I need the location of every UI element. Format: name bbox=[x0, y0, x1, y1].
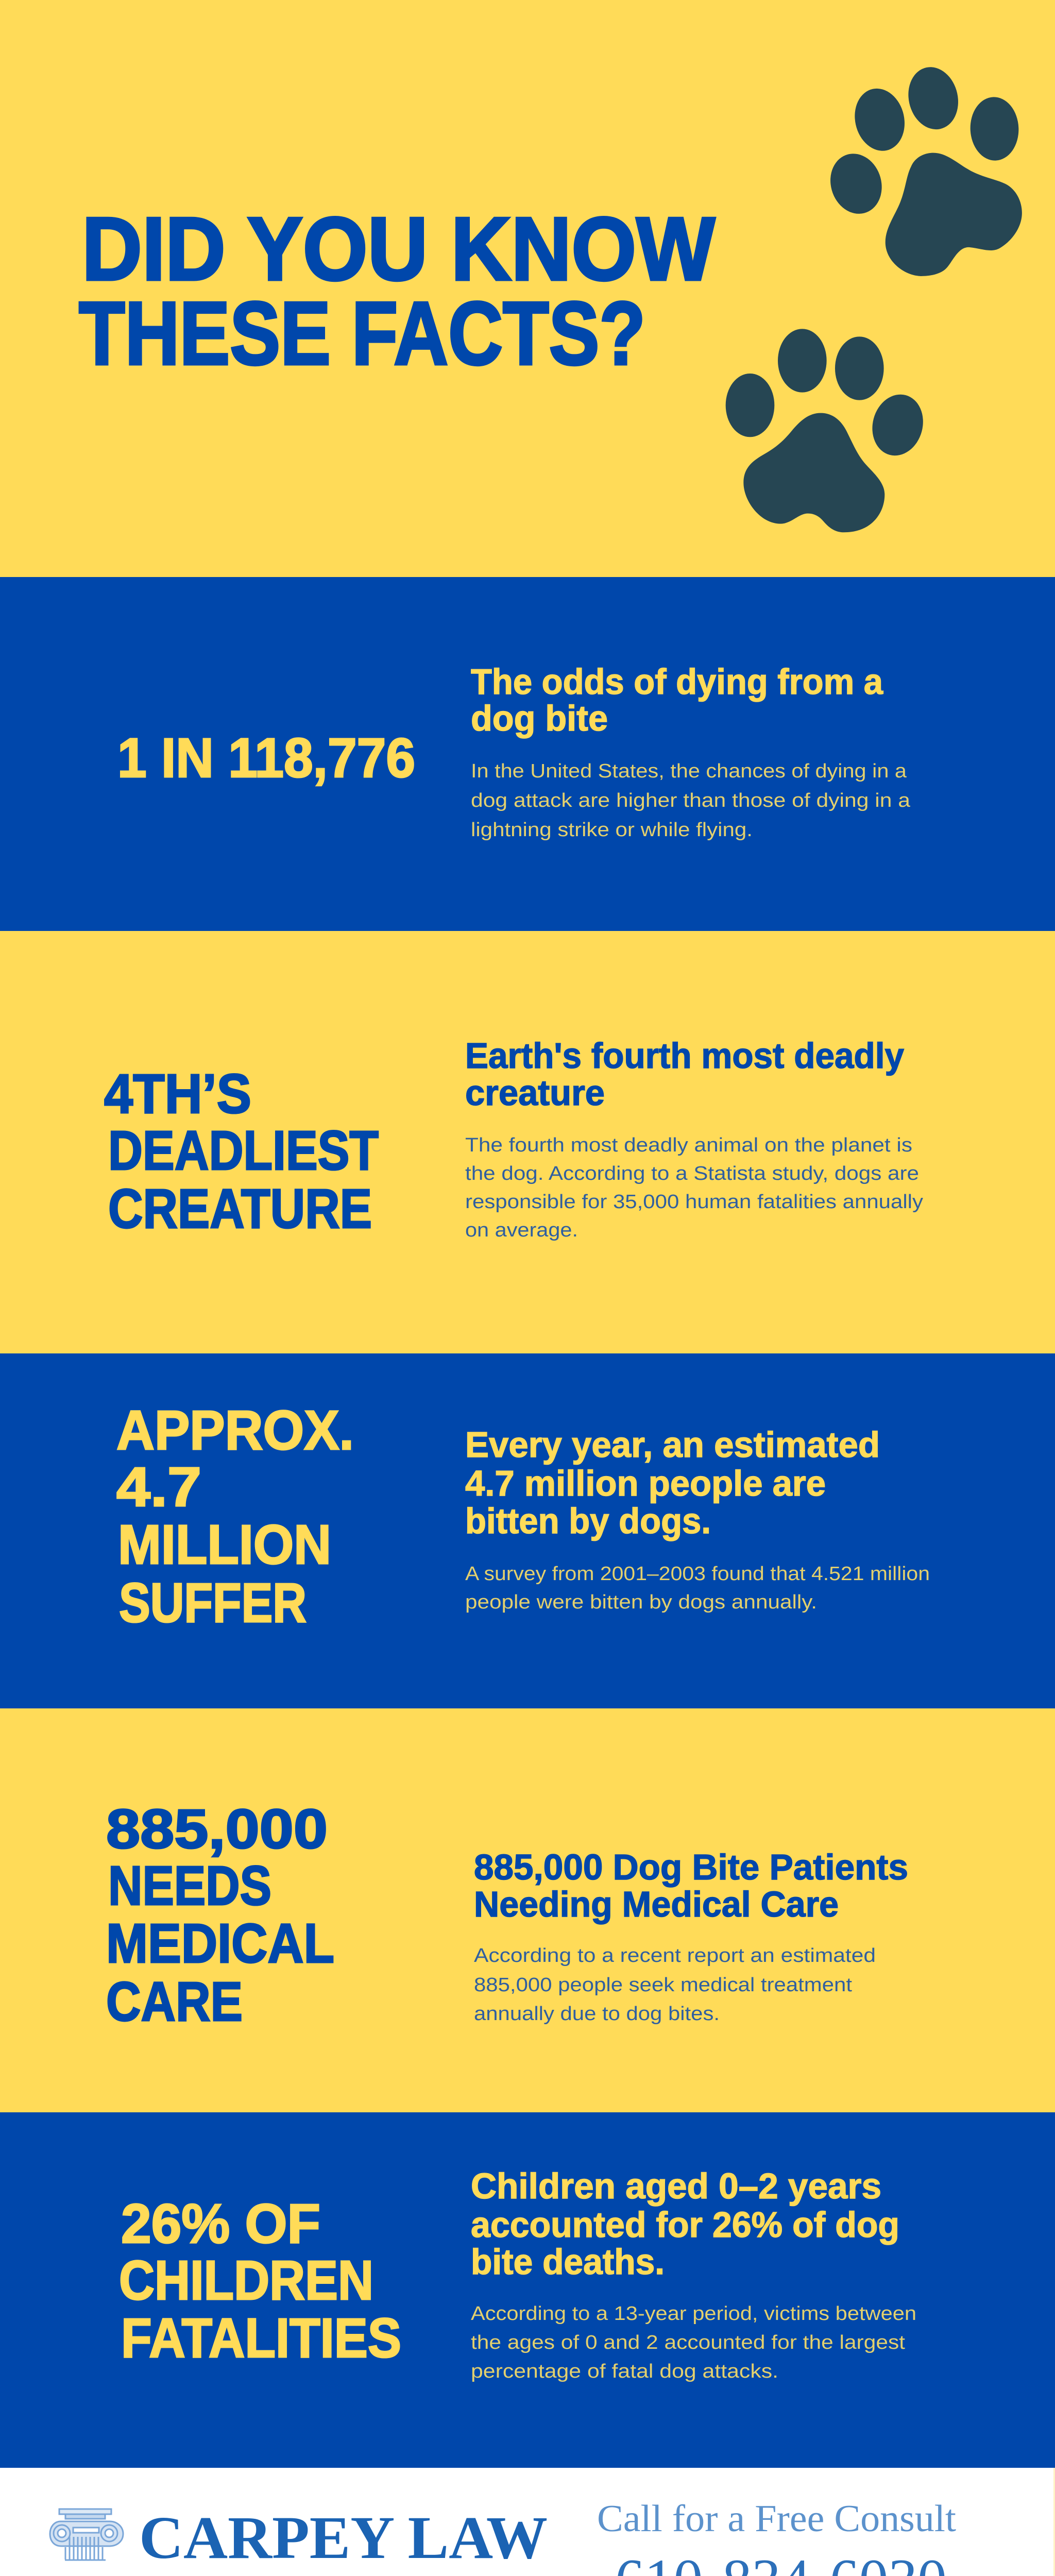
icon: paw print lower bbox=[726, 329, 930, 532]
stat: 4th's deadliest creature bbox=[104, 1062, 379, 1240]
body text bbox=[465, 1563, 930, 1613]
heading: accounted for 26% of dog bbox=[471, 2205, 899, 2245]
title: DID YOU KNOW bbox=[82, 198, 716, 299]
stat: 26% of children fatalities: CHILDREN bbox=[119, 2249, 373, 2311]
stat: approx 4.7 million suffer: MILLION bbox=[118, 1513, 331, 1575]
heading: bitten by dogs. bbox=[465, 1501, 711, 1541]
body text: the dog. According to a Statista study, dogs are bbox=[465, 1163, 919, 1184]
heading: bite deaths. bbox=[471, 2242, 665, 2282]
body text: A survey from 2001–2003 found that 4.521 million bbox=[465, 1563, 930, 1585]
heading: The odds of dying from a bbox=[471, 662, 883, 702]
body text: responsible for 35,000 human fatalities annually bbox=[465, 1191, 923, 1213]
logo text: CARPEY LAW bbox=[139, 2504, 548, 2571]
stat: 4th's deadliest creature: DEADLIEST bbox=[108, 1119, 379, 1181]
body text bbox=[474, 1945, 876, 2025]
icon: paw print upper right bbox=[824, 62, 1022, 276]
body text: people were bitten by dogs annually. bbox=[465, 1591, 817, 1613]
heading: creature bbox=[465, 1073, 605, 1113]
body text: According to a 13-year period, victims between bbox=[471, 2303, 916, 2325]
heading bbox=[465, 1036, 904, 1113]
body text: annually due to dog bites. bbox=[474, 2003, 720, 2025]
heading: Children aged 0–2 years bbox=[471, 2166, 881, 2206]
stat: 885,000 needs medical care bbox=[106, 1798, 334, 2032]
stat: 885,000 needs medical care: 885,000 bbox=[106, 1798, 328, 1860]
body text bbox=[471, 760, 911, 841]
stat: approx 4.7 million suffer bbox=[116, 1399, 354, 1634]
heading bbox=[474, 1847, 908, 1924]
title: THESE FACTS? bbox=[79, 283, 645, 383]
stat: 26% of children fatalities: 26% OF bbox=[121, 2192, 320, 2255]
body text: lightning strike or while flying. bbox=[471, 819, 753, 841]
body text: percentage of fatal dog attacks. bbox=[471, 2361, 778, 2382]
stat: 4th's deadliest creature: 4TH’S bbox=[104, 1062, 251, 1125]
stat: approx 4.7 million suffer: SUFFER bbox=[119, 1571, 307, 1634]
icon: ionic column logo bbox=[50, 2509, 123, 2560]
stat: 885,000 needs medical care: MEDICAL bbox=[106, 1912, 334, 1974]
stat: 4th's deadliest creature: CREATURE bbox=[108, 1177, 372, 1240]
stat: 26% of children fatalities: FATALITIES bbox=[121, 2307, 401, 2369]
heading bbox=[471, 2166, 899, 2282]
body text: 885,000 people seek medical treatment bbox=[474, 1974, 852, 1996]
heading bbox=[471, 662, 883, 738]
header panel bbox=[0, 0, 1055, 577]
heading: Every year, an estimated bbox=[465, 1425, 880, 1465]
heading: Needing Medical Care bbox=[474, 1884, 839, 1924]
body text: the ages of 0 and 2 accounted for the largest bbox=[471, 2332, 905, 2353]
body text bbox=[471, 2303, 916, 2382]
stat: 885,000 needs medical care: NEEDS bbox=[108, 1854, 271, 1917]
panel: odds of dying bbox=[0, 577, 1055, 931]
heading: 4.7 million people are bbox=[465, 1463, 826, 1503]
heading bbox=[465, 1425, 880, 1541]
body text: on average. bbox=[465, 1219, 578, 1241]
stat: 885,000 needs medical care: CARE bbox=[106, 1970, 243, 2032]
body text: According to a recent report an estimated bbox=[474, 1945, 876, 1967]
stat: 1 in 118,776: 1 IN 118,776 bbox=[117, 726, 415, 789]
panel: fourth deadliest bbox=[0, 931, 1055, 1353]
stat: 26% of children fatalities bbox=[119, 2192, 401, 2369]
panel: bitten annually bbox=[0, 1353, 1055, 1708]
panel: children fatalities bbox=[0, 2112, 1055, 2468]
heading: 885,000 Dog Bite Patients bbox=[474, 1847, 908, 1887]
body text: The fourth most deadly animal on the planet is bbox=[465, 1134, 912, 1156]
stat: approx 4.7 million suffer: 4.7 bbox=[116, 1455, 201, 1518]
panel: footer bbox=[0, 2468, 1055, 2576]
heading: dog bite bbox=[471, 698, 608, 738]
title bbox=[79, 198, 716, 383]
call to action: Call for a Free Consult bbox=[597, 2498, 956, 2540]
body text bbox=[465, 1134, 923, 1241]
body text: dog attack are higher than those of dying in a bbox=[471, 790, 911, 811]
body text: In the United States, the chances of dying in a bbox=[471, 760, 907, 782]
stat: approx 4.7 million suffer: APPROX. bbox=[116, 1399, 354, 1461]
panel: medical care bbox=[0, 1708, 1055, 2112]
heading: Earth's fourth most deadly bbox=[465, 1036, 904, 1076]
